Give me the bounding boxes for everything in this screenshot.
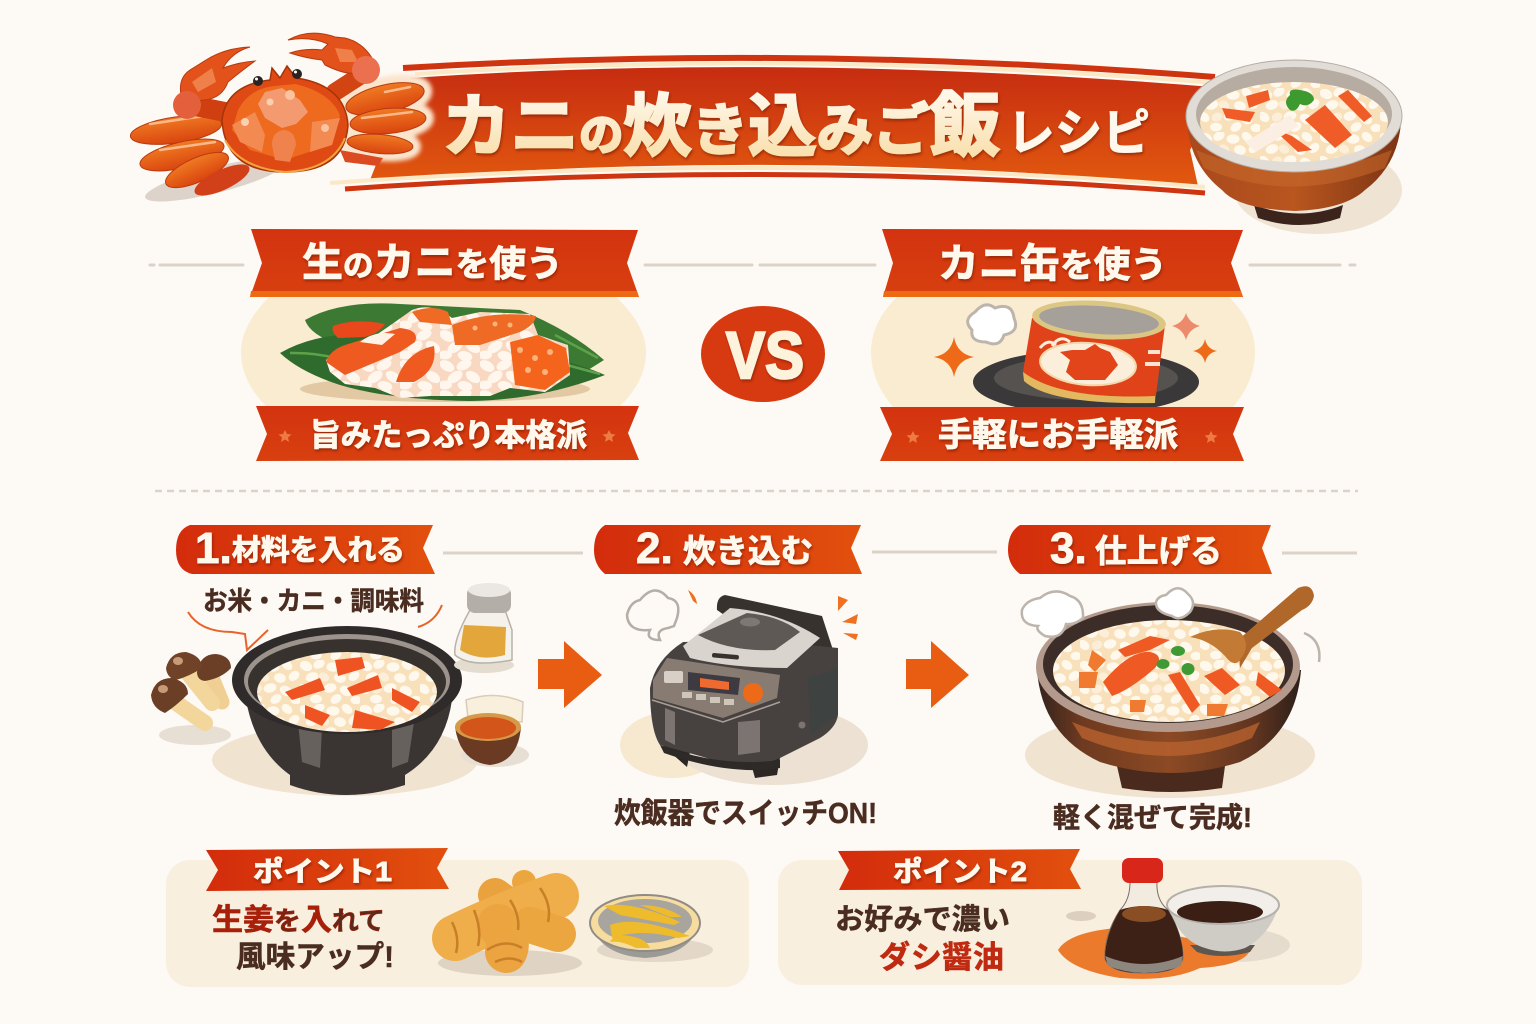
speech bracket [188,605,442,650]
caption: done: 軽く混ぜて完成! [1053,802,1252,833]
illustration: small sauce bowls [455,695,529,767]
point 1 ribbon [206,848,449,891]
step 2 ribbon: 炊き込む [683,533,813,569]
step 3 ribbon: 3. [1050,524,1087,573]
step 3 ribbon: 仕上げる [1095,533,1222,569]
illustration: seasoning bottle [454,583,514,673]
title text: レシピ [1007,105,1150,161]
panel: fresh crab [241,229,646,461]
icon: sparkles [934,337,1217,377]
illustration: finished rice bowl [1025,586,1315,798]
header ribbon: canned crab [882,229,1243,297]
step 3 ribbon [1008,524,1272,574]
step 3 [1008,524,1357,833]
wooden spoon [1190,586,1314,668]
arrow [538,641,602,708]
header ribbon: canned crab: カニ缶を使う [938,242,1167,286]
illustration: crab can on plate [973,296,1199,414]
header ribbon: fresh crab [250,229,639,297]
image background [241,296,646,408]
title text: カニの炊き込みご飯 [442,87,1000,165]
tagline ribbon: canned crab: 手軽にお手軽派 [938,416,1178,453]
illustration: crab meat on leaves [280,303,605,402]
tagline ribbon: fresh crab [256,406,639,461]
panel: point 2 [778,849,1362,985]
image background [871,296,1255,408]
tip text: ダシ醤油 [879,940,1004,975]
tagline ribbon: fresh crab: 旨みたっぷり本格派 [310,418,587,453]
icon: sparks [688,590,858,640]
icon: steam [968,305,1016,344]
point 2 ribbon [838,849,1081,890]
illustration: pot with rice [212,626,478,796]
divider [150,264,1355,266]
point 2 ribbon: ポイント2 [893,856,1027,887]
icon: steam [627,590,678,640]
illustration: ginger [438,882,582,976]
icon: steam [1022,588,1193,637]
icon: pink sparkle [1172,313,1200,340]
arrow [906,641,969,708]
title banner [330,58,1225,193]
step 2 ribbon [594,524,862,574]
panel: canned crab [871,229,1255,461]
tip text [835,903,1010,975]
illustration: rice cooker [620,595,868,785]
step 2 [594,524,997,830]
tip text: 風味アップ! [236,941,394,974]
motion mark [1304,633,1319,662]
panel: point 1 [166,848,749,987]
illustration: mushrooms [151,652,231,745]
VS badge: VS [726,318,804,392]
illustration: soy sauce and dish [1058,858,1290,979]
step 1 ribbon: 1. [195,524,232,573]
icon: finished rice bowl [1186,60,1402,234]
step 1 ribbon [176,524,435,574]
tagline ribbon: canned crab [880,407,1244,461]
tip text: 生姜を入れて [212,904,385,937]
divider [155,490,1358,492]
tip text [212,904,394,974]
illustration: pickled ginger bowl [590,895,713,962]
step 1 ribbon: 材料を入れる [232,534,405,567]
caption: ingredients: お米・カニ・調味料 [203,586,424,616]
header ribbon: fresh crab: 生のカニを使う [302,241,563,285]
icon: crab [129,33,427,210]
VS badge [701,306,825,402]
tip text: お好みで濃い [835,903,1010,936]
step 1 [151,524,583,796]
caption: switch on: 炊飯器でスイッチON! [614,797,877,830]
step 2 ribbon: 2. [636,524,673,573]
point 1 ribbon: ポイント1 [253,856,392,887]
